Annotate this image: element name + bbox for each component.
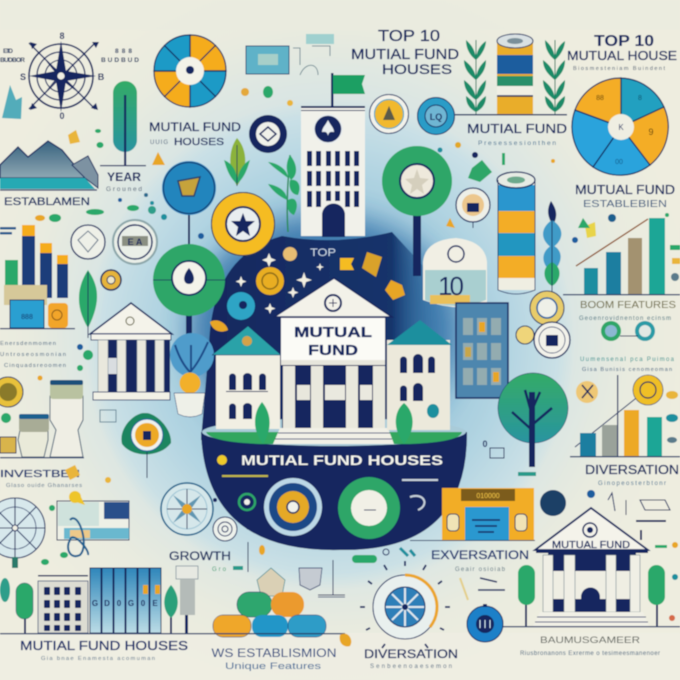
text: investment caption: Glaso ouide Ghanarses bbox=[6, 483, 82, 489]
chart: right pie: 00 bbox=[615, 159, 623, 166]
heading: mutual fund houses bottom: MUTIAL FUND HOUSES bbox=[20, 638, 188, 653]
icon: wheel medallion bbox=[161, 483, 213, 535]
icon: green leaf bbox=[79, 270, 97, 338]
icon: target circle bbox=[213, 517, 237, 541]
icon: row of books: 0 bbox=[141, 599, 146, 608]
heading: mutual fund houses in bowl: MUTIAL FUND HOUSES bbox=[241, 452, 443, 468]
heading: mutual fund center right: MUTIAL FUND bbox=[467, 121, 567, 136]
icon: gold star coin bbox=[211, 192, 275, 256]
chart: right pie: 88 bbox=[596, 95, 604, 102]
chart: right pie bbox=[572, 78, 668, 175]
heading: top 10 mutual fund houses: HOUSES bbox=[382, 61, 452, 77]
icon: plant leaves center left bbox=[224, 138, 250, 186]
icon: row of gold and ring badges: Gisa Bunisis cenomeoman bbox=[582, 367, 672, 373]
text: left captions: Cinquadsreoomen bbox=[4, 363, 66, 369]
text: mutual fund caption: Presessesionthen bbox=[478, 140, 556, 147]
text: top left labels: E TD bbox=[3, 48, 13, 55]
icon: dark orb bbox=[540, 490, 566, 516]
heading: top 10 mutual house bbox=[567, 33, 677, 72]
icon: compass top left: B bbox=[98, 72, 105, 82]
icon: left house bbox=[212, 326, 281, 444]
heading: top 10 mutual house: Biosmesteniam Buindent bbox=[573, 66, 665, 72]
heading: mutual fund establishment: ESTABLEBIEN bbox=[583, 199, 667, 210]
text: left captions bbox=[0, 341, 66, 369]
heading: exversation: EXVERSATION bbox=[431, 548, 529, 562]
icon: faint sketch top bbox=[293, 34, 334, 75]
chart: right pie: 9 bbox=[648, 127, 654, 137]
icon: compass top left: S bbox=[20, 72, 26, 82]
text: top left labels bbox=[0, 48, 139, 64]
icon: compass top left bbox=[20, 31, 105, 121]
icon: sky stars and coins bbox=[210, 247, 405, 332]
panel: navy central backdrop bbox=[201, 232, 445, 440]
icon: small tower left edge bbox=[2, 85, 22, 119]
icon: arched panel bbox=[423, 238, 487, 308]
icon: padlock leaf medallion bbox=[121, 413, 171, 478]
icon: row of books: 0 bbox=[117, 599, 122, 608]
heading: year: Grouned bbox=[106, 186, 142, 193]
icon: yellow and blue badges bbox=[370, 94, 458, 134]
icon: stacked balls bbox=[213, 568, 326, 637]
icon: main temple with sign bbox=[273, 278, 394, 444]
icon: row of books: G bbox=[128, 599, 134, 608]
icon: outline badges bbox=[71, 220, 157, 290]
icon: central office tower bbox=[301, 73, 365, 237]
icon: tablet grid bbox=[456, 303, 508, 398]
icon: pipe column bbox=[176, 566, 198, 633]
text: diversation bottom caption: Senbeenoaesemon bbox=[370, 664, 452, 670]
heading: growth: GROWTH bbox=[169, 549, 231, 563]
icon: temple side trees bbox=[490, 565, 680, 627]
heading: investment: INVESTBEN bbox=[0, 468, 80, 480]
icon: left temple bbox=[90, 303, 172, 400]
icon: small compass left bbox=[0, 498, 45, 558]
chart: teal bars upper right bbox=[563, 218, 680, 295]
heading: ws establishment: WS ESTABLISMION bbox=[212, 648, 336, 660]
icon: potted plant bbox=[170, 333, 214, 417]
icon: yellow flag bbox=[340, 258, 354, 270]
chart: left bars bbox=[0, 225, 68, 298]
icon: left coin bbox=[0, 377, 23, 407]
icon: jars bbox=[0, 380, 84, 458]
chart: top donut wheel bbox=[154, 35, 226, 107]
chart: right pie: 8 bbox=[638, 95, 642, 102]
icon: yellow storefront panel bbox=[410, 488, 535, 541]
icon: large green tree right bbox=[498, 373, 568, 467]
icon: row of books: D bbox=[104, 599, 110, 608]
heading: top 10 mutual fund houses bbox=[351, 28, 459, 77]
icon: mountains bbox=[0, 141, 98, 190]
text: left captions: Untroseosmonian bbox=[0, 352, 66, 358]
icon: compass top left: 8 bbox=[59, 31, 65, 41]
icon: main temple with sign: MUTUAL bbox=[294, 324, 372, 341]
icon: folder and coin card: 888 bbox=[21, 314, 33, 321]
text: bottom left caption: Gia bnae Enamesta acomuman bbox=[41, 656, 155, 662]
icon: pill tree top bbox=[100, 81, 146, 166]
text: bottom right caption: Riusbronanons Exrerme o tesimeesmanenoer bbox=[520, 651, 660, 657]
heading: diversation right: DIVERSATION bbox=[585, 463, 679, 477]
heading: mutual fund houses upper left: MUTIAL FUND bbox=[149, 122, 241, 134]
text: top left labels: BUDBOR bbox=[0, 57, 25, 64]
icon: yellow and blue badges: LQ bbox=[430, 112, 442, 122]
icon: arched panel: 10 bbox=[438, 271, 464, 301]
icon: fern plant bbox=[268, 155, 300, 232]
icon: row of books: E bbox=[152, 599, 158, 608]
icon: shield glyph and pin bbox=[299, 560, 345, 597]
icon: bottom left trees bbox=[16, 583, 178, 633]
text: features caption: Geoenrovidnenton ecinsm bbox=[579, 316, 671, 322]
heading: bottom right label: BAUMUSGAMEER bbox=[540, 635, 641, 645]
icon: folder and coin card bbox=[0, 285, 75, 329]
heading: top 10 mutual house: TOP 10 bbox=[594, 33, 654, 50]
icon: compass top left: 0 bbox=[59, 111, 65, 121]
icon: green badge cluster bbox=[578, 218, 596, 238]
icon: bottom right temple bbox=[533, 508, 649, 626]
panel: bowl base bbox=[201, 418, 467, 550]
text: top left labels: BUDBUD bbox=[101, 57, 139, 64]
text: unique features: Unique Features bbox=[225, 661, 321, 672]
text: top left labels: 888 bbox=[115, 48, 132, 55]
icon: scattered small dots: 0 bbox=[482, 439, 488, 449]
icon: row of books bbox=[90, 568, 161, 633]
icon: row of gold and ring badges: Uumensenal pca Puimoa bbox=[580, 357, 675, 363]
icon: outline badges: E A bbox=[128, 237, 143, 247]
icon: card with chart bbox=[57, 491, 129, 540]
icon: blue circle connector bbox=[162, 161, 216, 252]
icon: bottom right temple: MUTUAL FUND bbox=[552, 540, 630, 551]
icon: feather leaves bbox=[543, 201, 561, 292]
heading: top 10 mutual fund houses: TOP 10 bbox=[378, 28, 440, 45]
icon: row of books: G bbox=[92, 599, 98, 608]
heading: boom features: BOOM FEATURES bbox=[580, 300, 676, 311]
chart: bars lower right bbox=[570, 375, 680, 457]
text: left captions: Enersdenmomen bbox=[0, 341, 56, 347]
heading: mutual fund establishment bbox=[575, 182, 675, 210]
icon: picture card top bbox=[246, 46, 289, 74]
heading: diversation bottom: DIVERSATION bbox=[364, 647, 458, 661]
icon: padlock medallion bbox=[456, 188, 490, 228]
heading: mutual fund houses upper left bbox=[149, 122, 241, 148]
icon: tall blue and orange cylinder bbox=[497, 172, 535, 294]
text: top label: TOP bbox=[310, 247, 336, 259]
icon: green diamond bbox=[468, 160, 492, 182]
text: diversation caption: Ginopeosterbtonr bbox=[598, 481, 666, 487]
icon: navy badge bbox=[249, 115, 287, 153]
text: exversation caption: Geair osioiab bbox=[455, 567, 506, 573]
heading: mutual fund houses upper left: UUIG bbox=[150, 140, 168, 146]
icon: row of gold and ring badges bbox=[516, 291, 675, 373]
icon: bowl emblems bbox=[217, 455, 438, 539]
icon: green tree with medallion bbox=[153, 244, 225, 340]
icon: right house bbox=[387, 320, 452, 444]
heading: year bbox=[106, 172, 142, 193]
heading: top 10 mutual fund houses: MUTIAL FUND bbox=[351, 46, 459, 63]
chart: right pie: K bbox=[618, 123, 624, 132]
icon: yellow storefront panel: 010000 bbox=[476, 493, 500, 500]
heading: year: YEAR bbox=[107, 172, 142, 184]
icon: coin stack with laurels bbox=[455, 34, 567, 116]
text: growth caption: Gro bbox=[212, 567, 227, 573]
icon: dial wheel with sunburst bbox=[360, 561, 450, 648]
icon: right green lollipop tree bbox=[382, 146, 452, 276]
heading: mutual fund houses upper left: HOUSES bbox=[174, 136, 224, 148]
heading: top 10 mutual house: MUTUAL HOUSE bbox=[567, 49, 677, 63]
icon: main temple with sign: FUND bbox=[308, 342, 358, 359]
base line bottom left bbox=[0, 633, 345, 634]
icon: building block bbox=[38, 575, 88, 633]
icon: blue stopwatch badge bbox=[467, 604, 503, 642]
heading: establishment: ESTABLAMEN bbox=[4, 196, 90, 208]
heading: mutual fund establishment: MUTUAL FUND bbox=[575, 182, 675, 197]
